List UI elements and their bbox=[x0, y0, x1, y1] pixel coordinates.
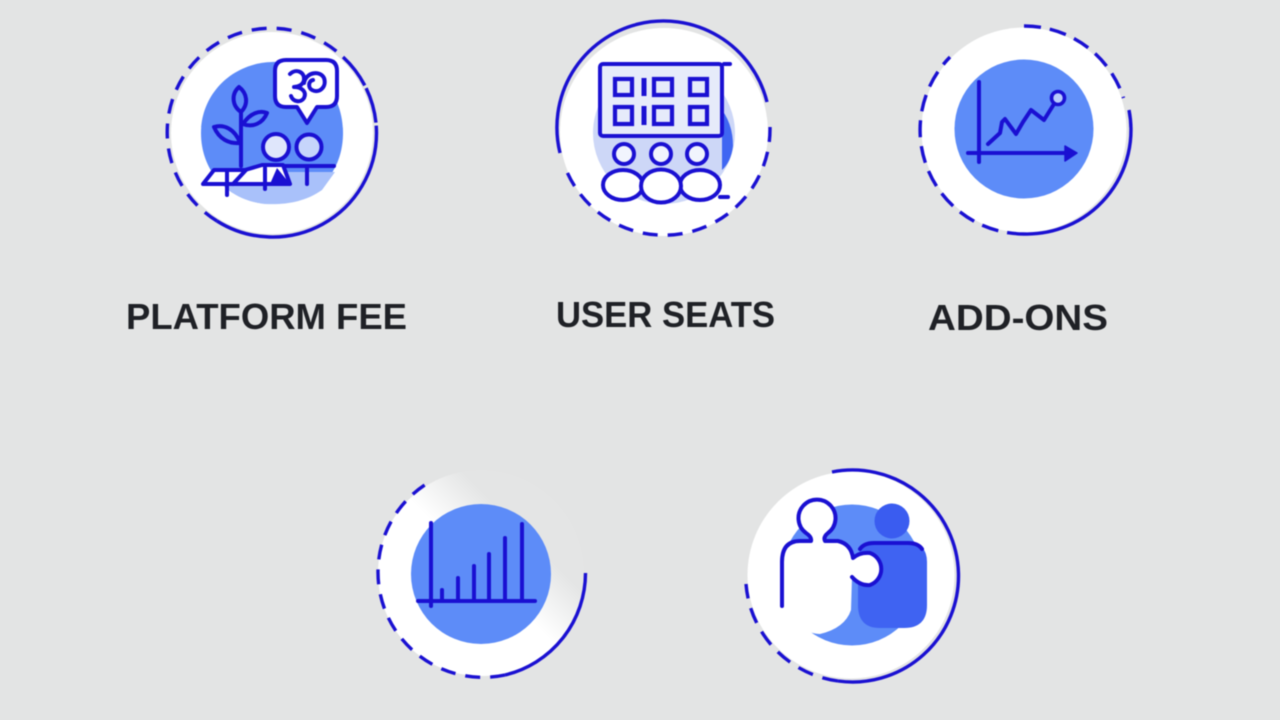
icon ring: platform fee bbox=[167, 28, 376, 237]
panel: user seats bbox=[556, 21, 775, 335]
heading: add-ons: ADD-ONS bbox=[928, 297, 1108, 338]
icon ring: usage bbox=[378, 470, 586, 677]
panel: support bbox=[746, 470, 959, 682]
icon ring: add-ons bbox=[920, 26, 1131, 234]
icon: bar chart bbox=[411, 504, 551, 644]
icon: two puzzle-piece people bbox=[782, 500, 927, 646]
heading: platform fee: PLATFORM FEE bbox=[126, 296, 407, 337]
icon ring: support bbox=[746, 470, 959, 682]
panel: usage bbox=[378, 470, 586, 677]
panel: platform fee bbox=[126, 28, 407, 337]
panel: add-ons bbox=[920, 26, 1131, 338]
icon: dashboard and seated users bbox=[593, 62, 735, 204]
icon ring: user seats bbox=[557, 21, 770, 236]
heading: user seats: USER SEATS bbox=[556, 294, 775, 335]
icon: rising line chart bbox=[954, 60, 1094, 198]
icon: plant, people and speech bubble bbox=[201, 60, 343, 204]
